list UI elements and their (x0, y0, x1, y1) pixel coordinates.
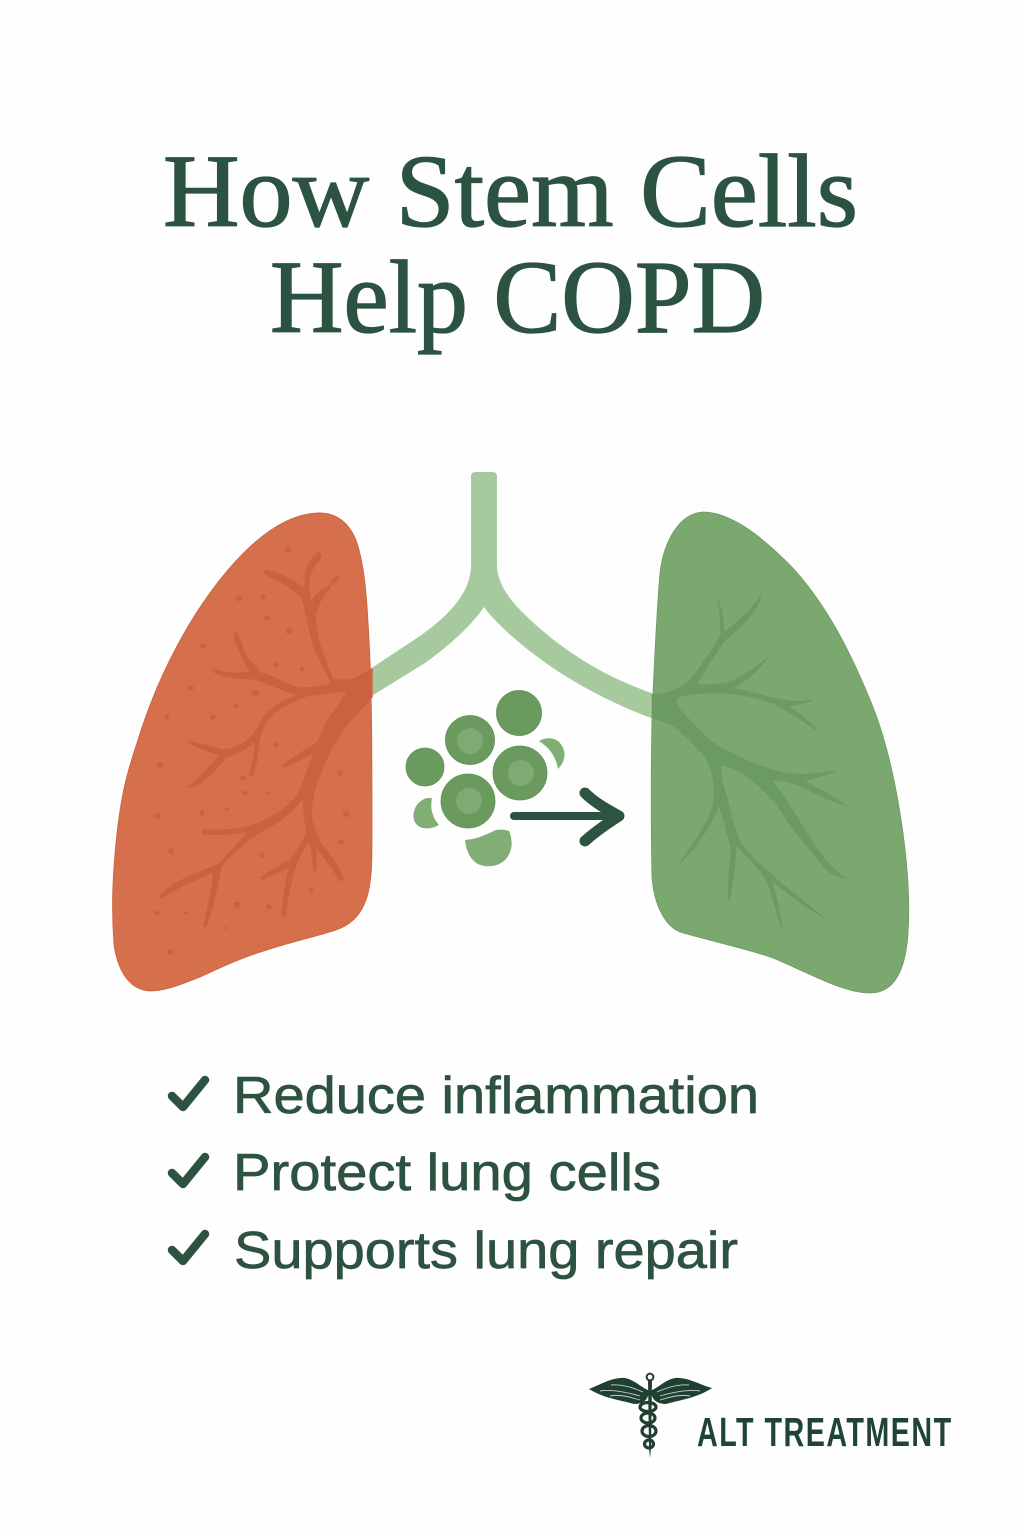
trachea and bronchi (370, 472, 654, 719)
nucleated cell lower (441, 774, 495, 828)
left lung spots (154, 547, 349, 955)
left lung bronchial branches (160, 552, 372, 927)
benefit: supports lung repair: Supports lung repair (234, 1222, 738, 1280)
left lung: damaged (113, 513, 372, 991)
cell fragment right (539, 738, 565, 769)
left lung shape (113, 513, 372, 991)
title: How Stem Cells (163, 134, 858, 249)
plain cell top (496, 690, 542, 736)
title (163, 134, 858, 355)
right lung bronchial branches (652, 595, 848, 928)
stem cell cluster (406, 690, 565, 866)
benefits checklist (172, 1067, 759, 1280)
plain cell left (406, 748, 444, 786)
right lung: healthy (651, 512, 909, 993)
right lung shape (651, 512, 909, 993)
logo: caduceus and brand name (589, 1374, 951, 1458)
nucleated cell upper (446, 716, 494, 764)
title: Help COPD (270, 240, 765, 355)
benefit: reduce inflammation: Reduce inflammation (233, 1067, 759, 1125)
arrow to healthy lung (514, 793, 619, 841)
icon: caduceus (589, 1374, 712, 1458)
cell fragment left (414, 798, 439, 828)
nucleated cell right (493, 746, 547, 800)
benefit: protect lung cells: Protect lung cells (233, 1144, 661, 1202)
cell fragment bottom (465, 830, 512, 866)
brand name: ALT TREATMENT (697, 1410, 951, 1455)
